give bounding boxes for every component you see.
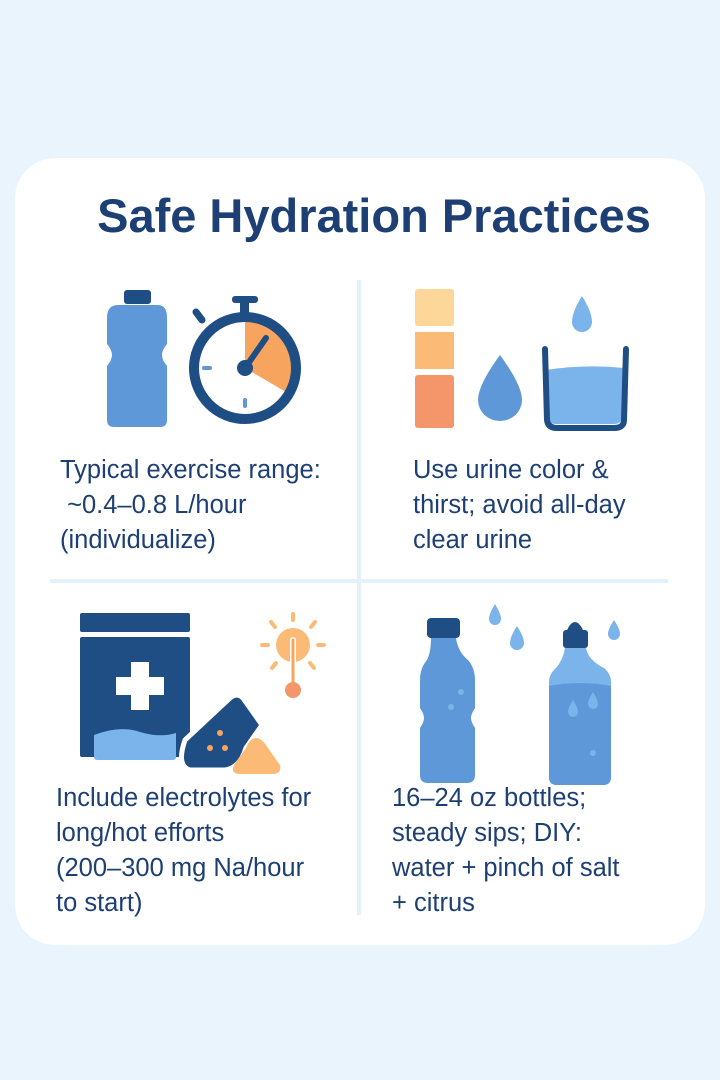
- text: bottles: 16–24 oz bottles;: [392, 784, 586, 812]
- card panel: [15, 158, 705, 945]
- icon: water bottle: [107, 290, 167, 427]
- text: electrolytes: to start): [56, 889, 142, 917]
- text: urine color: Use urine color &: [413, 456, 609, 484]
- text: bottles: [392, 784, 620, 917]
- text: urine color: clear urine: [413, 526, 532, 554]
- icon: bottle 16oz: [420, 618, 475, 783]
- text: exercise range: ~0.4–0.8 L/hour: [67, 491, 246, 519]
- text: bottles: + citrus: [392, 889, 475, 917]
- text: exercise range: (individualize): [60, 526, 216, 554]
- text: urine color: thirst; avoid all-day: [413, 491, 626, 519]
- text: exercise range: [60, 456, 321, 554]
- icon: electrolyte packet: [80, 613, 280, 774]
- icon: water drop: [478, 355, 522, 421]
- icon: urine color strip: [415, 289, 454, 428]
- text: electrolytes: (200–300 mg Na/hour: [56, 854, 304, 882]
- icon: glass of water: [545, 296, 626, 428]
- icon: sun thermometer: [262, 614, 324, 698]
- text: bottles: water + pinch of salt: [392, 854, 620, 882]
- text: urine color: [413, 456, 626, 554]
- text: bottles: steady sips; DIY:: [392, 819, 582, 847]
- text: electrolytes: long/hot efforts: [56, 819, 224, 847]
- icon: sport bottle: [549, 622, 611, 785]
- icon: falling drops: [489, 604, 620, 650]
- title: Safe Hydration Practices: [97, 189, 651, 242]
- text: electrolytes: [56, 784, 311, 917]
- text: electrolytes: Include electrolytes for: [56, 784, 311, 812]
- icon: stopwatch: [194, 296, 296, 419]
- text: exercise range: Typical exercise range:: [60, 456, 321, 484]
